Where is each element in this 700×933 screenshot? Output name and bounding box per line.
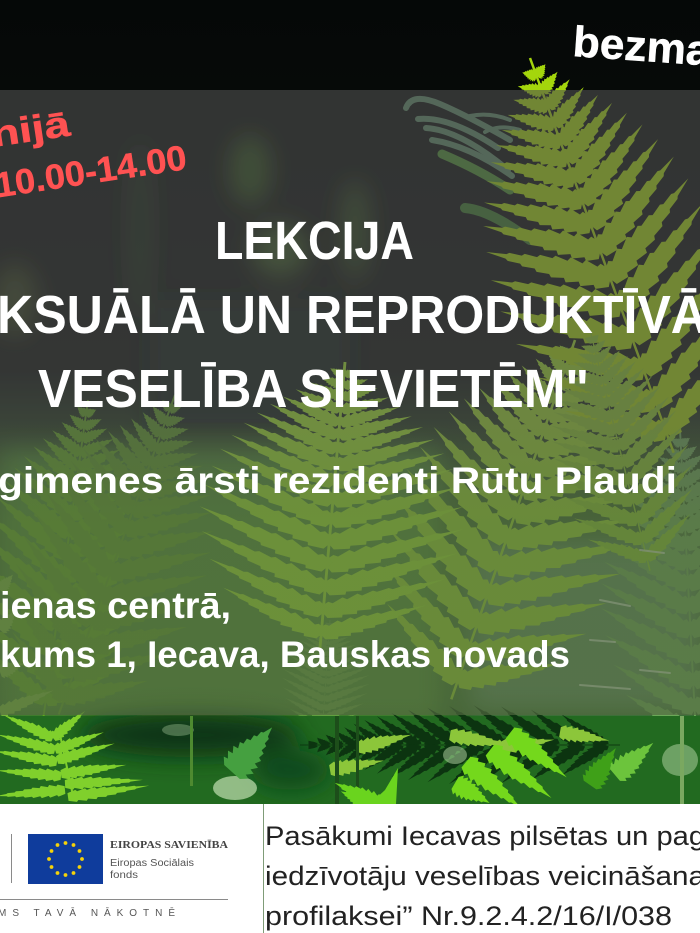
- lower continuation of the right fern: [519, 312, 700, 588]
- venue line 1: ienas centrā,: [0, 585, 231, 626]
- description line 2: iedzīvotāju veselības veicināšana: [265, 861, 700, 891]
- bright green highlights in strip: [329, 724, 611, 778]
- dark frond in strip: [300, 703, 620, 787]
- bright strip foliage: [0, 703, 700, 804]
- dim fern frond lower left: [0, 361, 269, 749]
- dim fern frond far left: [0, 387, 181, 730]
- pale out-of-focus patches: [162, 724, 698, 800]
- venue line 2: kums 1, Iecava, Bauskas novads: [0, 634, 570, 675]
- title line 3: VESELĪBA SIEVIETĒM": [38, 359, 589, 419]
- stems in strip: [190, 716, 684, 804]
- EU label: EIROPAS SAVIENĪBA: [110, 840, 229, 851]
- grey-green back fronds behind the top fern: [406, 99, 530, 240]
- bright fern bottom left: [0, 706, 150, 803]
- dark shaded patch in strip: [80, 713, 330, 790]
- title line 1: LEKCIJA: [215, 211, 414, 271]
- broad leaf in strip: [219, 716, 285, 784]
- lecture title: [0, 211, 700, 419]
- description line 1: Pasākumi Iecavas pilsētas un pag: [265, 821, 700, 851]
- small pinnae at left edge: [0, 570, 56, 718]
- footer divider: [263, 804, 264, 933]
- green tint over lower panel: [0, 420, 700, 715]
- pale light streaks: [580, 550, 670, 689]
- far right fern: [586, 425, 700, 754]
- EU flag: [28, 834, 103, 884]
- middle fern: [180, 350, 485, 661]
- EU logo block: [0, 834, 229, 919]
- slogan: MS TAVĀ NĀKOTNĒ: [0, 907, 175, 919]
- bright fern bottom right: [449, 724, 661, 817]
- lecturer line: gimenes ārsti rezidenti Rūtu Plaudi: [0, 460, 677, 501]
- fund label line 2: fonds: [110, 870, 138, 881]
- dark translucent overlay panel: [0, 90, 700, 715]
- top right large fern: [415, 16, 700, 494]
- second large fern: [332, 299, 695, 741]
- logo separator: [11, 834, 12, 883]
- description line 3: profilaksei” Nr.9.2.4.2/16/I/038: [265, 901, 672, 931]
- fund label: Eiropas Sociālais: [110, 858, 194, 869]
- dim fern frond lower middle: [275, 617, 377, 735]
- bright fern tip bottom centre: [331, 768, 398, 812]
- footer white band: [0, 804, 700, 933]
- project description: [265, 821, 700, 931]
- blurred background bokeh: [0, 135, 700, 720]
- logo rule: [0, 899, 228, 900]
- venue block: [0, 585, 570, 675]
